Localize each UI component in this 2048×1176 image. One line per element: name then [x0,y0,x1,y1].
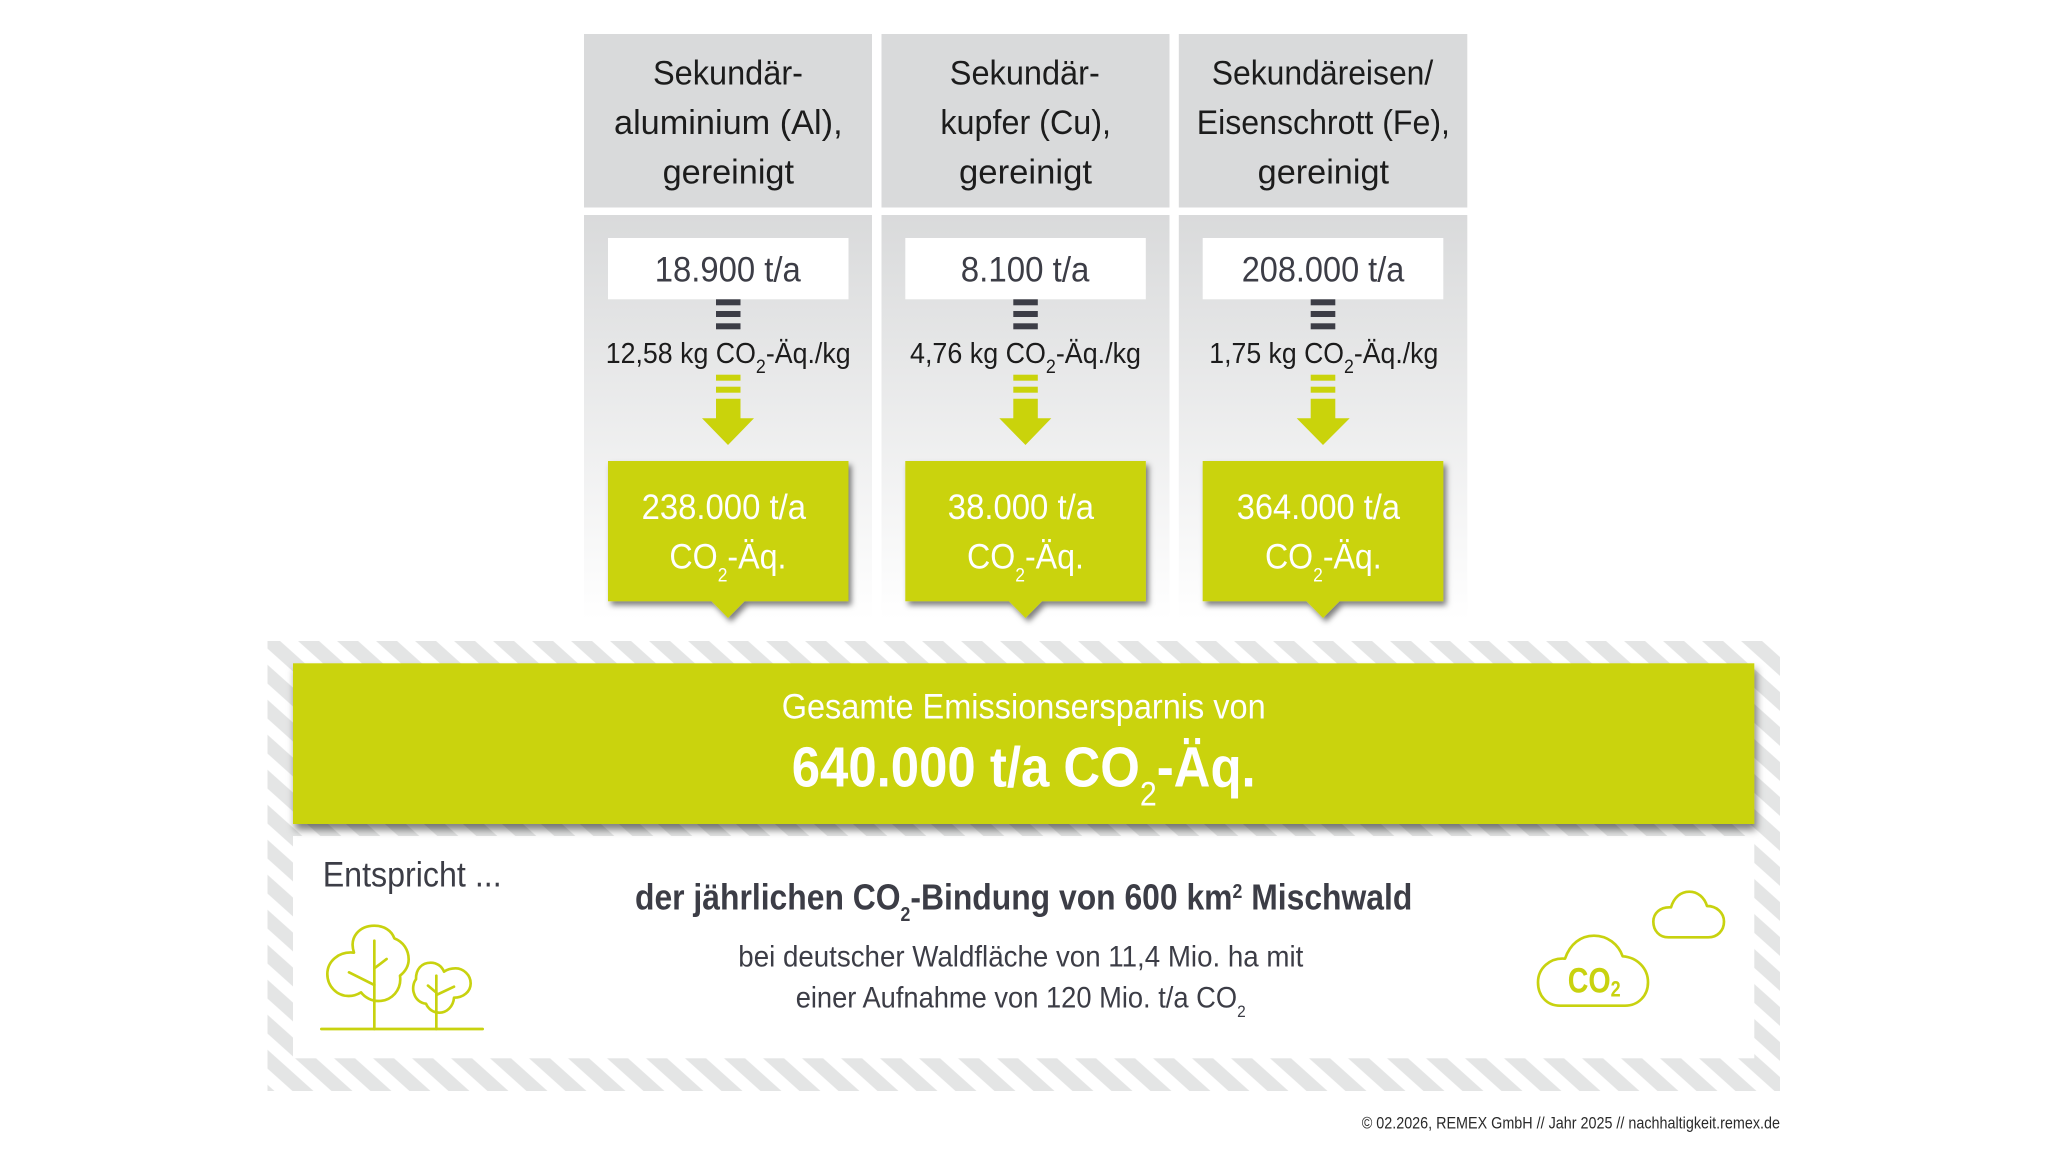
arrow [702,375,754,445]
equivalence headline: der jährlichen CO [635,876,935,917]
result box: -Äq. [1025,538,1084,576]
heading: copper: kupfer (Cu), [940,104,1111,142]
equivalence detail line 1: bei deutscher Waldfläche von 11,4 Mio. ha mit [738,941,1304,974]
emission factor: -Äq./kg [766,338,851,370]
emission factor: -Äq./kg [1056,338,1141,370]
banner value: 640.000 t/a CO [792,736,1181,800]
result box: -Äq. [727,538,786,576]
emission factor: 2 [1046,357,1056,378]
column body background [882,215,1170,620]
quantity box [608,238,848,299]
quantity box [1203,238,1443,299]
column body background [584,215,872,620]
icon: CO2 cloud: CO [1568,961,1620,1000]
panel: aluminium column [584,34,872,620]
heading: iron [1179,34,1467,208]
result box: CO [669,538,722,576]
quantity box: 18.900 t/a [655,250,801,290]
quantity box: 8.100 t/a [961,250,1090,290]
arrow [999,375,1051,445]
column body background [1179,215,1467,620]
quantity box: 208.000 t/a [1242,250,1405,290]
icon: equals bars [716,299,740,329]
panel: striped frame [268,641,1780,1091]
label: Entspricht: Entspricht ... [323,856,502,895]
heading: iron: gereinigt [1258,154,1390,192]
heading: aluminium [584,34,872,208]
equivalence headline: 2 [1233,881,1242,903]
emission factor: -Äq./kg [1354,338,1438,370]
equivalence detail line 2: einer Aufnahme von 120 Mio. t/a CO [796,981,1281,1014]
emission factor: 12,58 kg CO [606,338,766,370]
icon: CO2 cloud [1538,936,1648,1006]
emission factor: 2 [756,357,766,378]
result box: -Äq. [1323,538,1382,576]
banner subtitle: Gesamte Emissionsersparnis von [782,687,1266,726]
heading: copper [882,34,1170,208]
banner value: 2 [1140,776,1157,814]
heading: copper: gereinigt [959,154,1093,192]
result box: CO [1265,538,1318,576]
heading: aluminium: aluminium (Al), [614,104,843,142]
result box [608,461,848,618]
heading: iron: Sekundäreisen/ [1212,54,1434,92]
icon: small cloud [1653,892,1724,937]
result box: 2 [718,566,727,586]
copyright: © 02.2026, REMEX GmbH // Jahr 2025 // nachhaltigkeit.remex.de [1362,1114,1780,1132]
heading: aluminium: Sekundär- [653,54,803,92]
result box: 238.000 t/a [642,488,806,527]
equivalence headline: Mischwald [1242,876,1412,917]
result box [905,461,1146,618]
equivalence headline: -Bindung von 600 km [910,876,1233,917]
quantity box [905,238,1146,299]
hatched border [268,641,1780,1091]
result box [1203,461,1443,618]
equivalence panel background [293,836,1754,1058]
icon: trees [321,926,483,1029]
result box: 2 [1313,566,1323,586]
icon: equals bars [1013,299,1038,329]
arrow [1297,375,1350,445]
panel: iron column [1179,34,1467,620]
heading: iron: Eisenschrott (Fe), [1197,104,1450,142]
panel: copper column [882,34,1170,620]
emission factor: 2 [1344,357,1354,378]
result box: 364.000 t/a [1237,488,1400,527]
result box: CO [967,538,1020,576]
heading: copper: Sekundär- [950,54,1100,92]
banner: total savings [293,663,1754,824]
result box: 2 [1015,566,1025,586]
heading: aluminium: gereinigt [663,154,795,192]
banner value: -Äq. [1157,736,1256,800]
result box: 38.000 t/a [948,488,1094,527]
equivalence headline: 2 [901,904,910,926]
emission factor: 1,75 kg CO [1209,338,1353,370]
icon: CO2 cloud: 2 [1611,976,1621,1001]
equivalence detail line 2: 2 [1237,1002,1246,1021]
icon: equals bars [1311,299,1335,329]
emission factor: 4,76 kg CO [910,338,1054,370]
